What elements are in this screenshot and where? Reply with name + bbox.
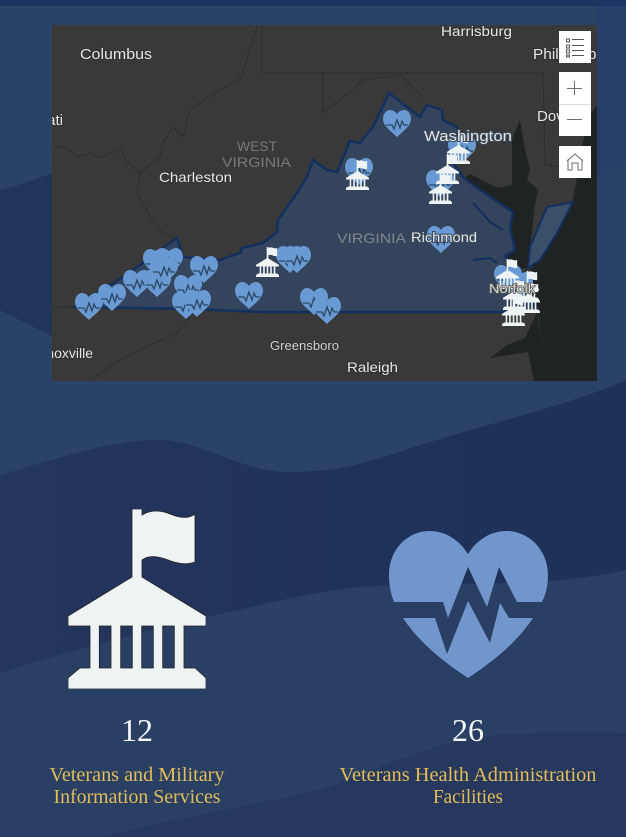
institution markers — [256, 134, 540, 326]
caption: Information Services — [54, 787, 220, 808]
city labels above markers: Richmond — [411, 229, 477, 245]
caption: Veterans Health Administration — [340, 765, 597, 786]
caption — [340, 765, 597, 808]
map labels: WEST — [237, 138, 277, 154]
city labels above markers: Norfolk — [489, 282, 536, 296]
icon: institution with flag — [68, 509, 206, 689]
map labels: Knoxville — [37, 345, 93, 361]
Virginia highlighted — [75, 93, 573, 312]
heart markers — [75, 110, 533, 324]
state boundaries — [50, 25, 570, 380]
map labels: Columbus — [80, 46, 152, 63]
caption — [50, 765, 225, 808]
home button — [559, 146, 591, 178]
map land base — [52, 25, 597, 381]
caption: Facilities — [433, 787, 503, 808]
stat: veterans health administration facilities — [340, 531, 597, 808]
map labels: Harrisburg — [441, 23, 512, 39]
map labels: Philadelphia — [533, 46, 618, 63]
map labels: Raleigh — [347, 359, 398, 375]
map labels: VIRGINIA — [222, 154, 292, 170]
ocean and Chesapeake water — [465, 105, 597, 381]
map panel — [52, 25, 597, 381]
count 26: 26 — [452, 712, 484, 748]
city labels above markers: Washington — [424, 128, 512, 145]
map labels: Greensboro — [270, 338, 339, 353]
icon: heart with pulse — [389, 531, 548, 678]
map labels: Charleston — [159, 169, 232, 185]
map labels: Dover — [537, 108, 577, 125]
caption: Veterans and Military — [50, 765, 225, 786]
map legend button — [559, 31, 591, 63]
city labels above markers: VIRGINIA — [337, 230, 407, 246]
count 12: 12 — [121, 712, 153, 748]
stat: veterans and military information services — [50, 509, 225, 808]
city labels above markers — [337, 128, 536, 296]
map labels — [52, 26, 596, 375]
zoom buttons — [559, 72, 591, 136]
